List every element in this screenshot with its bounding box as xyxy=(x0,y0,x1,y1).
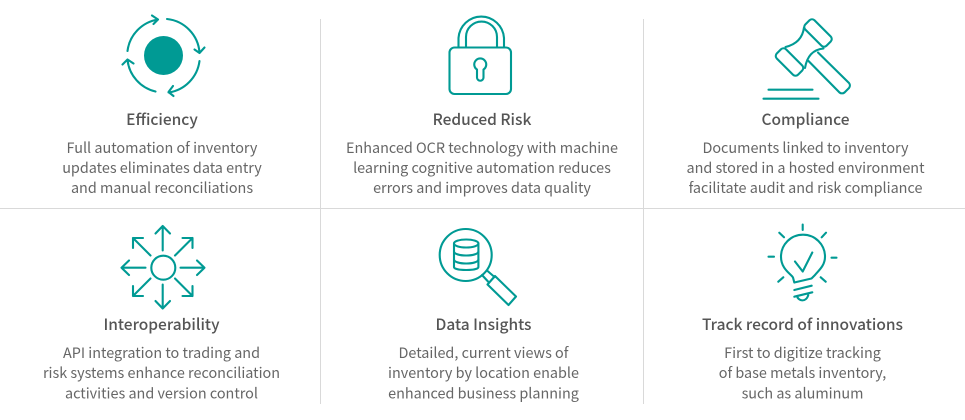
heading: compliance: Compliance xyxy=(762,108,850,130)
text: efficiency description: and manual reconciliations xyxy=(71,177,253,198)
icon: padlock xyxy=(450,17,511,94)
panel: track record of innovations xyxy=(702,224,903,404)
heading: reduced risk: Reduced Risk xyxy=(433,108,531,130)
heading: track record of innovations: Track record of innovations xyxy=(702,313,903,335)
text: interoperability description: activities and version control xyxy=(65,382,258,404)
text: compliance description: and stored in a hosted environment xyxy=(686,157,925,178)
text: interoperability description: API integration to trading and xyxy=(63,342,260,363)
icon: arrows radiating from a circle xyxy=(122,226,204,308)
icon: light bulb with check mark xyxy=(768,224,836,300)
panel: reduced risk xyxy=(346,17,618,198)
text: reduced risk description: Enhanced OCR technology with machine xyxy=(346,137,618,158)
heading: interoperability: Interoperability xyxy=(103,313,220,335)
panel: data insights xyxy=(388,229,579,404)
text: reduced risk description: learning cognitive automation reduces xyxy=(353,157,611,178)
text: track record description: First to digitize tracking xyxy=(724,342,881,363)
icon: cycle arrows around a dot xyxy=(122,16,204,96)
heading: data insights: Data Insights xyxy=(435,313,532,335)
panel: compliance xyxy=(686,18,925,198)
icon: magnifier over database xyxy=(440,229,516,305)
heading: efficiency: Efficiency xyxy=(126,108,198,130)
text: reduced risk description: errors and improves data quality xyxy=(373,177,591,198)
text: interoperability description: risk systems enhance reconciliation xyxy=(43,362,280,383)
text: data insights description: inventory by location enable xyxy=(388,362,579,383)
text: track record description: of base metals inventory, xyxy=(719,362,886,383)
panel: interoperability xyxy=(43,226,280,404)
text: data insights description: enhanced business planning xyxy=(388,382,579,404)
text: track record description: such as aluminum xyxy=(742,382,863,404)
text: efficiency description: updates eliminates data entry xyxy=(62,157,262,178)
icon: gavel xyxy=(764,18,850,99)
panel: efficiency xyxy=(62,16,262,198)
text: data insights description: Detailed, current views of xyxy=(399,342,570,363)
text: compliance description: facilitate audit and risk compliance xyxy=(689,177,922,198)
text: compliance description: Documents linked to inventory xyxy=(702,137,909,158)
text: efficiency description: Full automation of inventory xyxy=(67,137,258,158)
